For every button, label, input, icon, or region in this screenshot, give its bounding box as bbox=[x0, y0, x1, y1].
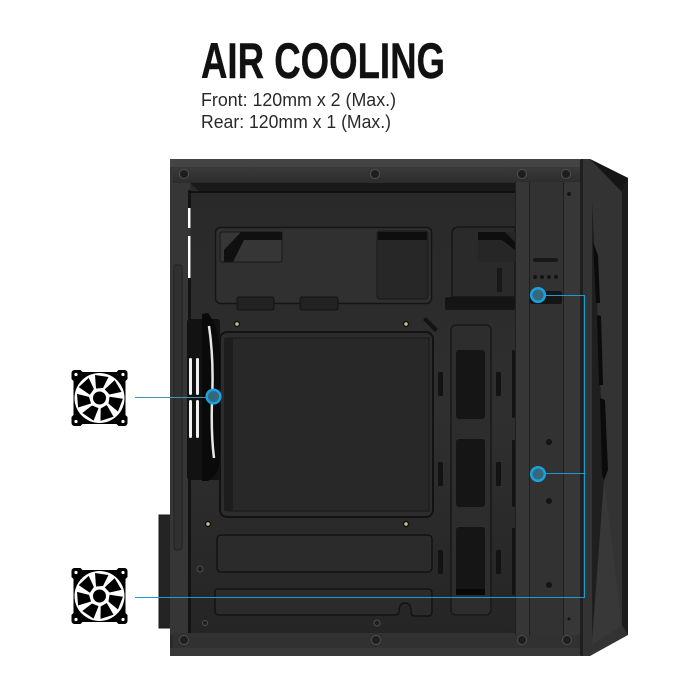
title: AIR COOLING bbox=[201, 33, 445, 89]
specification text: Front: 120mm x 2 (Max.) bbox=[201, 90, 396, 110]
motherboard tray recess bbox=[220, 332, 433, 517]
standoffs bbox=[206, 322, 408, 526]
top rail bbox=[170, 159, 584, 193]
vented panel bbox=[451, 325, 491, 615]
fan icon: front fan bbox=[72, 568, 128, 624]
marker: rear fan bbox=[207, 390, 220, 403]
connector lines bbox=[135, 296, 586, 598]
front panel bbox=[581, 159, 628, 656]
PC case interior bbox=[159, 159, 628, 656]
lower panel one bbox=[217, 535, 432, 572]
rear bracket bbox=[159, 515, 171, 628]
tray slots bbox=[423, 317, 515, 595]
drive bay column bbox=[515, 160, 581, 655]
rear fan bbox=[187, 313, 220, 481]
upper right bracket bbox=[445, 227, 515, 310]
specification text bbox=[201, 90, 396, 132]
specification text: Rear: 120mm x 1 (Max.) bbox=[201, 112, 391, 132]
left frame bbox=[170, 165, 191, 635]
case body bbox=[170, 159, 584, 656]
marker: front fan upper bbox=[531, 288, 545, 302]
marker: front fan lower bbox=[531, 467, 545, 481]
back wall bbox=[190, 192, 516, 635]
lower panel two bbox=[215, 589, 432, 616]
upper bracket panel bbox=[216, 228, 432, 310]
screws bbox=[180, 170, 572, 644]
bottom rail bbox=[170, 633, 584, 656]
fan icon: rear fan bbox=[72, 370, 128, 426]
